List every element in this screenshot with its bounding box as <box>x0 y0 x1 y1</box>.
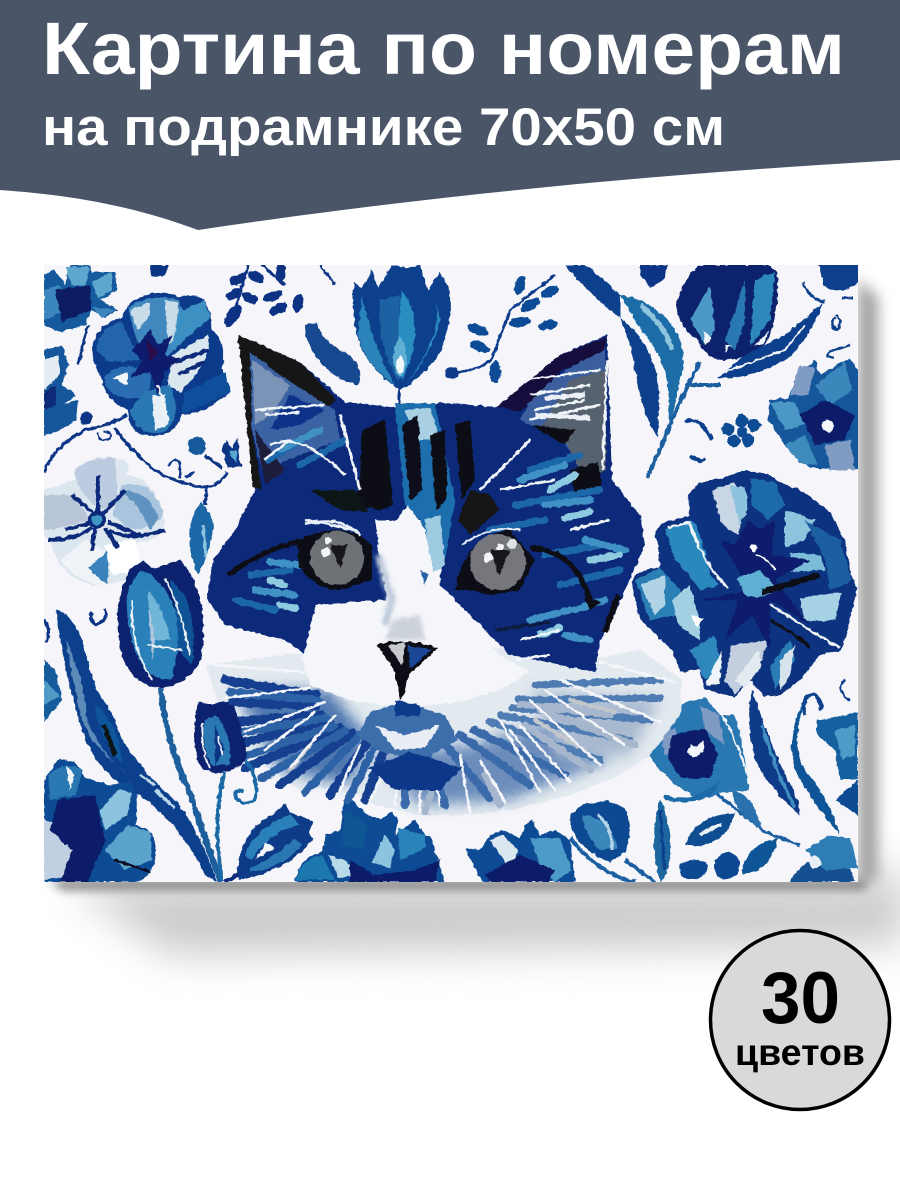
tulip: top center <box>353 265 450 410</box>
cat head dark fur <box>207 335 645 672</box>
small flower: right mid <box>722 414 760 448</box>
white ear strokes <box>535 395 590 418</box>
flower: upper right small <box>768 358 860 470</box>
left ear inner <box>245 352 340 470</box>
flower: dark lower right <box>643 697 750 803</box>
left eye <box>228 521 372 590</box>
forehead markings <box>310 403 500 580</box>
header banner <box>0 0 900 230</box>
canvas shadow <box>50 278 900 955</box>
tulip: left large <box>118 560 221 882</box>
buds and leaf: beside left ear <box>188 437 242 575</box>
vine: left curls <box>44 413 227 505</box>
fur streaks radiating from muzzle <box>215 662 675 812</box>
small decorations: left edge <box>44 608 106 722</box>
flower: bottom center <box>295 795 445 882</box>
leaf and stem: top right curving <box>565 265 720 478</box>
flower: bottom left <box>44 760 156 882</box>
title: Картина по номерам <box>42 7 845 90</box>
flower: partial left edge <box>44 325 88 436</box>
sprigs: top left <box>221 263 360 385</box>
painting canvas: cat among blue flowers <box>44 263 860 882</box>
cat chin <box>358 700 462 790</box>
tulip: top right with leaves <box>676 265 823 378</box>
badge label: цветов <box>735 1032 865 1073</box>
tulip: bottom right center <box>570 800 670 882</box>
cat fur base <box>206 640 682 815</box>
tulip: small lower left <box>194 702 256 880</box>
tulip bud: bottom center left <box>225 803 314 882</box>
leaves: tall right stems <box>749 690 858 835</box>
flower: big right <box>632 470 857 697</box>
white whiskers on head <box>255 360 610 660</box>
right eye <box>455 529 618 632</box>
leaves and buds: bottom right <box>680 790 858 882</box>
cat white blaze and muzzle <box>302 505 530 708</box>
badge number: 30 <box>761 958 840 1039</box>
leaf: long S-curve left <box>56 610 217 882</box>
blobs: top edge <box>150 265 668 288</box>
cat <box>206 335 682 815</box>
flower: dark blue upper left <box>92 293 231 436</box>
right ear inner <box>520 346 606 450</box>
blue streak details <box>235 430 625 640</box>
badge: 30 colours <box>710 930 890 1110</box>
sprig: top center right <box>445 274 560 383</box>
flower: pale left <box>44 457 165 585</box>
cat nose <box>377 641 438 700</box>
flower: bottom center right <box>465 820 575 882</box>
subtitle: на подрамнике 70х50 см <box>42 98 725 157</box>
curl ornament: top right corner <box>803 265 858 700</box>
flower: top left corner <box>44 265 118 332</box>
